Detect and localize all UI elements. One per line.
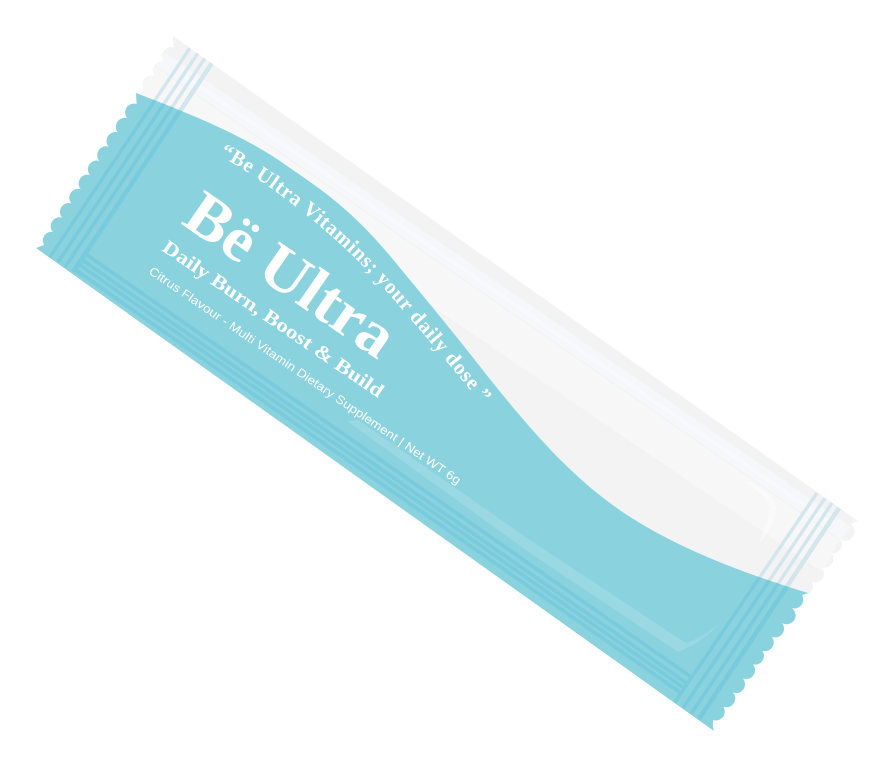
- title: Bë Ultra: Bë Ultra: [172, 177, 410, 372]
- product description: Citrus Flavour - Multi Vitamin Dietary Supplement | Net WT 6g: [146, 264, 464, 487]
- subtitle: Daily Burn, Boost & Build: [158, 237, 387, 402]
- panel: white foil upper part: [143, 36, 858, 594]
- curved tagline: “Be Ultra Vitamins; your daily dose ”: [224, 145, 492, 397]
- panel: teal label part: [36, 93, 808, 731]
